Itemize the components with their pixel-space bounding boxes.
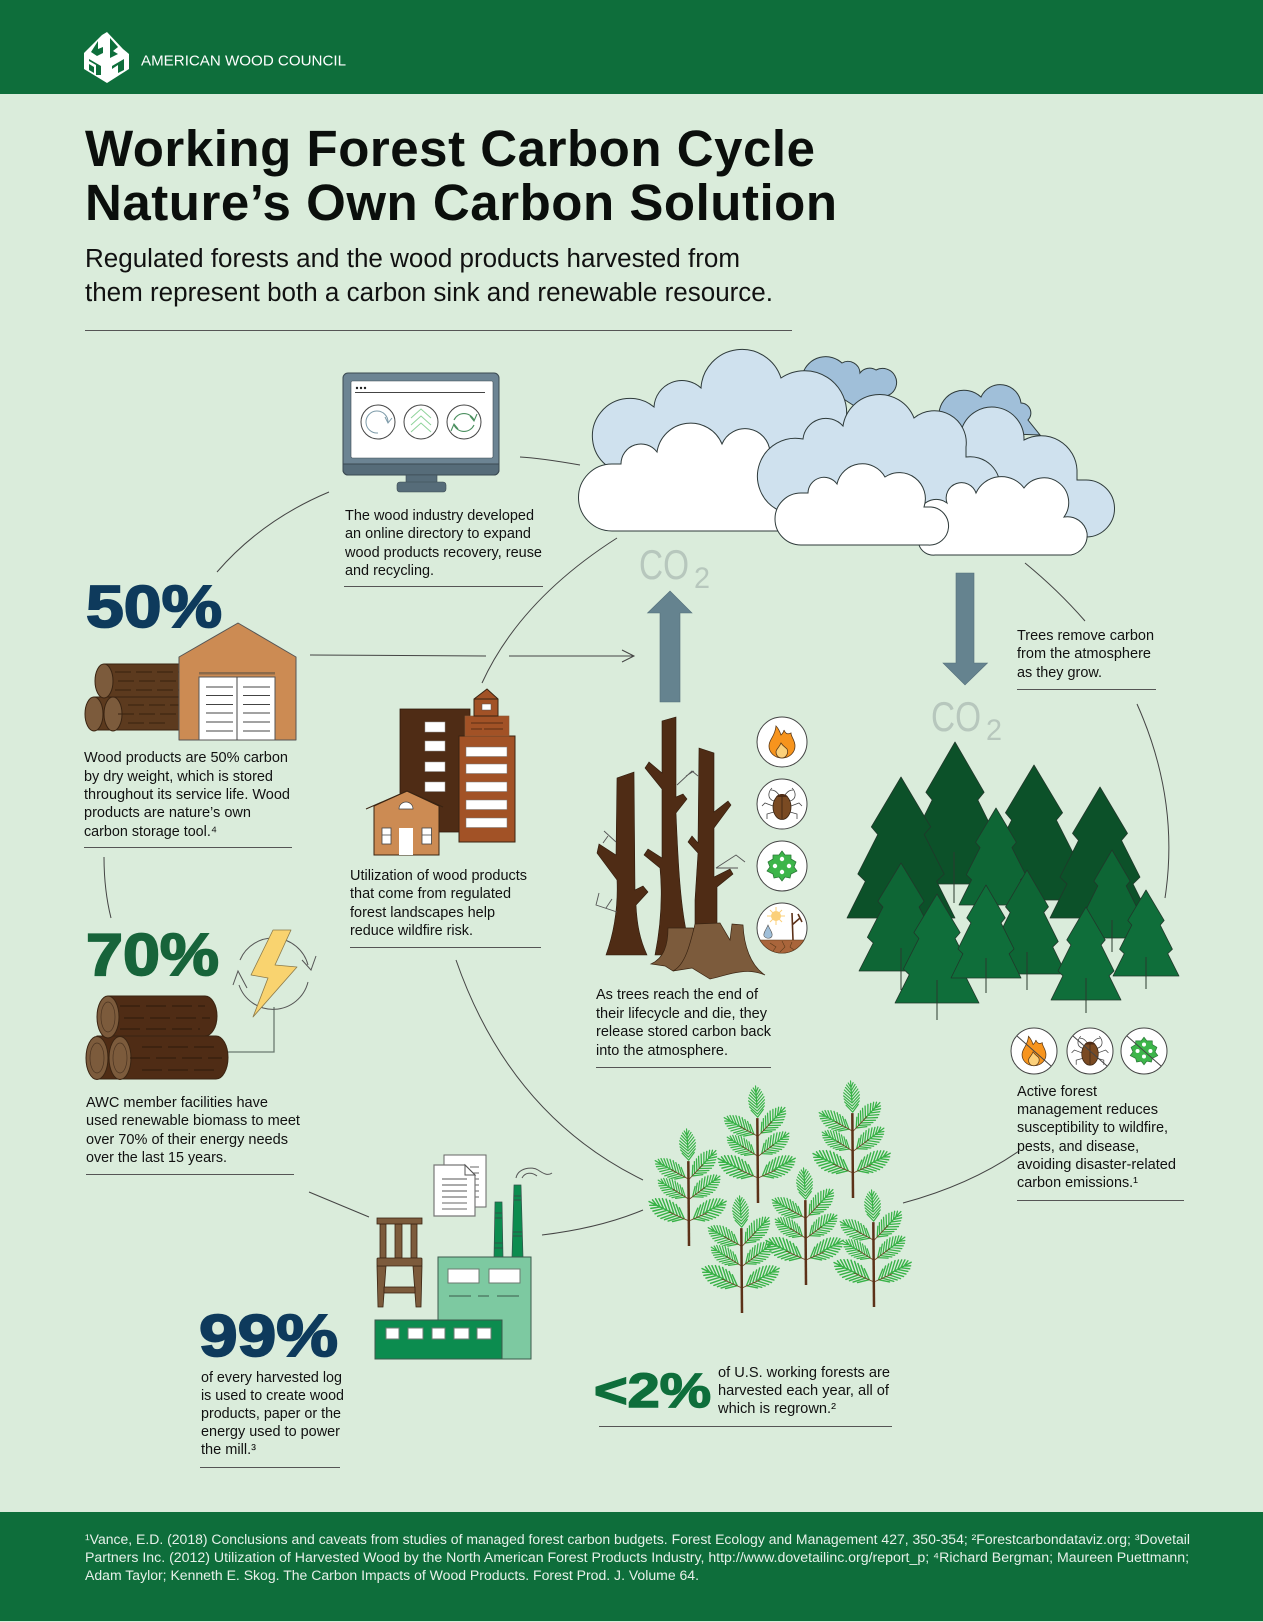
stat: 99%: 99%	[199, 1303, 338, 1369]
text: monitor: wood products recovery, reuse	[344, 545, 542, 561]
text: trees die: their lifecycle and die, they	[596, 1006, 768, 1022]
logo wordmark: AMERICAN WOOD COUNCIL	[141, 54, 346, 70]
icon: paper sheets	[434, 1155, 486, 1216]
icon: mill factory	[375, 1168, 552, 1359]
text: active forest management	[1017, 1084, 1184, 1200]
subtitle: Regulated forests and the wood products harvested from	[85, 245, 740, 273]
title	[85, 120, 837, 231]
CO2 label rising: CO	[639, 541, 689, 588]
text: monitor: The wood industry developed	[345, 508, 534, 524]
icon: beetle	[757, 779, 807, 829]
icon: drought	[757, 903, 807, 953]
footer band	[0, 1512, 1263, 1621]
text: monitor	[344, 508, 543, 586]
text: trees remove carbon: as they grow.	[1017, 665, 1102, 681]
icon: pine saplings	[645, 1080, 916, 1313]
icon: computer monitor	[343, 373, 499, 492]
icon: stacked logs	[86, 996, 228, 1080]
header band	[0, 0, 1263, 94]
references	[85, 1532, 1190, 1583]
icon: no disease	[1121, 1028, 1167, 1074]
text: trees remove carbon	[1017, 628, 1156, 690]
text: monitor: and recycling.	[345, 563, 434, 579]
text: biomass energy: over the last 15 years.	[86, 1150, 227, 1166]
subtitle: them represent both a carbon sink and renewable resource.	[85, 279, 773, 307]
title: Working Forest Carbon Cycle	[85, 120, 815, 177]
text: harvested log: is used to create wood	[201, 1388, 344, 1404]
CO2 label rising: 2	[694, 562, 710, 595]
icon: disease	[757, 841, 807, 891]
text: wood products carbon: products are nature’s own	[84, 805, 251, 821]
text: active forest management: avoiding disaster-related	[1017, 1157, 1176, 1173]
text: wood products carbon: throughout its service life. Wood	[84, 787, 290, 803]
text: harvested each year: of U.S. working forests are	[718, 1365, 890, 1381]
CO2 label above forest: CO	[931, 693, 981, 740]
text: harvested log: energy used to power	[201, 1424, 340, 1440]
text: harvested log: the mill.³	[201, 1442, 256, 1458]
text: wood products carbon: by dry weight, which is stored	[84, 769, 273, 785]
text: harvested each year	[599, 1365, 892, 1426]
stat: less than 2%: <2%	[594, 1365, 711, 1418]
icon: evergreen forest	[847, 742, 1179, 1020]
cycle connector lines	[104, 457, 1169, 1235]
text: trees die: release stored carbon back	[596, 1024, 772, 1040]
text: utilization: that come from regulated	[350, 886, 511, 902]
text: trees die	[596, 987, 772, 1068]
text: harvested log: products, paper or the	[201, 1406, 341, 1422]
text: trees die: into the atmosphere.	[596, 1043, 728, 1059]
subtitle	[85, 245, 773, 307]
text: trees die: As trees reach the end of	[596, 987, 759, 1003]
text: harvested each year: which is regrown.²	[717, 1401, 836, 1417]
text: biomass energy: over 70% of their energy needs	[86, 1132, 288, 1148]
text: wood products carbon: carbon storage tool.⁴	[84, 824, 217, 840]
text: harvested log: of every harvested log	[201, 1370, 342, 1386]
text: wood products carbon: Wood products are 50% carbon	[84, 750, 288, 766]
text: utilization	[350, 868, 541, 948]
text: monitor: an online directory to expand	[345, 526, 531, 542]
references: Adam Taylor; Kenneth E. Skog. The Carbon Impacts of Wood Products. Forest Prod. J. Volume 64.	[85, 1568, 699, 1583]
logo mark	[84, 32, 129, 83]
icon: biomass energy bolt	[228, 930, 316, 1052]
text: utilization: reduce wildfire risk.	[350, 923, 473, 939]
references: ¹Vance, E.D. (2018) Conclusions and caveats from studies of managed forest carbon budgets. Forest Ecology and Management 427, 350-354; ²Forestcarbondataviz.org; ³Dovetail	[85, 1532, 1190, 1547]
arrow: carbon absorbed down	[943, 573, 988, 685]
text: utilization: forest landscapes help	[350, 905, 495, 921]
text: trees remove carbon: from the atmosphere	[1017, 646, 1151, 662]
references: Partners Inc. (2012) Utilization of Harvested Wood by the North American Forest Products Industry, http://www.dovetailinc.org/report_p; ⁴Richard Bergman; Maureen Puettmann;	[85, 1550, 1189, 1565]
icon: no pests	[1067, 1028, 1113, 1074]
icon: clouds	[578, 349, 1115, 555]
icon: wildfire	[757, 717, 807, 767]
text: active forest management: management reduces	[1017, 1102, 1158, 1118]
icon: chair	[377, 1218, 422, 1307]
arrow: carbon released up	[648, 591, 692, 702]
icon: logs and warehouse	[85, 623, 296, 740]
icon: city buildings and house	[366, 689, 515, 855]
text: active forest management: Active forest	[1017, 1084, 1097, 1100]
icon: no wildfire	[1011, 1028, 1057, 1074]
text: biomass energy: AWC member facilities have	[86, 1095, 268, 1111]
CO2 label above forest: 2	[986, 714, 1002, 747]
stat: 50%: 50%	[86, 574, 222, 640]
text: active forest management: carbon emissions.¹	[1017, 1175, 1138, 1191]
text: biomass energy: used renewable biomass to meet	[86, 1113, 300, 1129]
text: harvested each year: harvested each year, all of	[718, 1383, 890, 1399]
text: wood products carbon	[84, 750, 292, 848]
text: harvested log	[200, 1370, 344, 1468]
icon: dead trees and stump	[596, 717, 765, 979]
text: trees remove carbon: Trees remove carbon	[1017, 628, 1154, 644]
text: biomass energy	[86, 1095, 300, 1174]
text: utilization: Utilization of wood products	[350, 868, 527, 884]
text: active forest management: pests, and disease,	[1017, 1139, 1139, 1155]
text: active forest management: susceptibility to wildfire,	[1017, 1120, 1168, 1136]
title: Nature’s Own Carbon Solution	[85, 174, 837, 231]
stat: 70%: 70%	[86, 922, 219, 988]
